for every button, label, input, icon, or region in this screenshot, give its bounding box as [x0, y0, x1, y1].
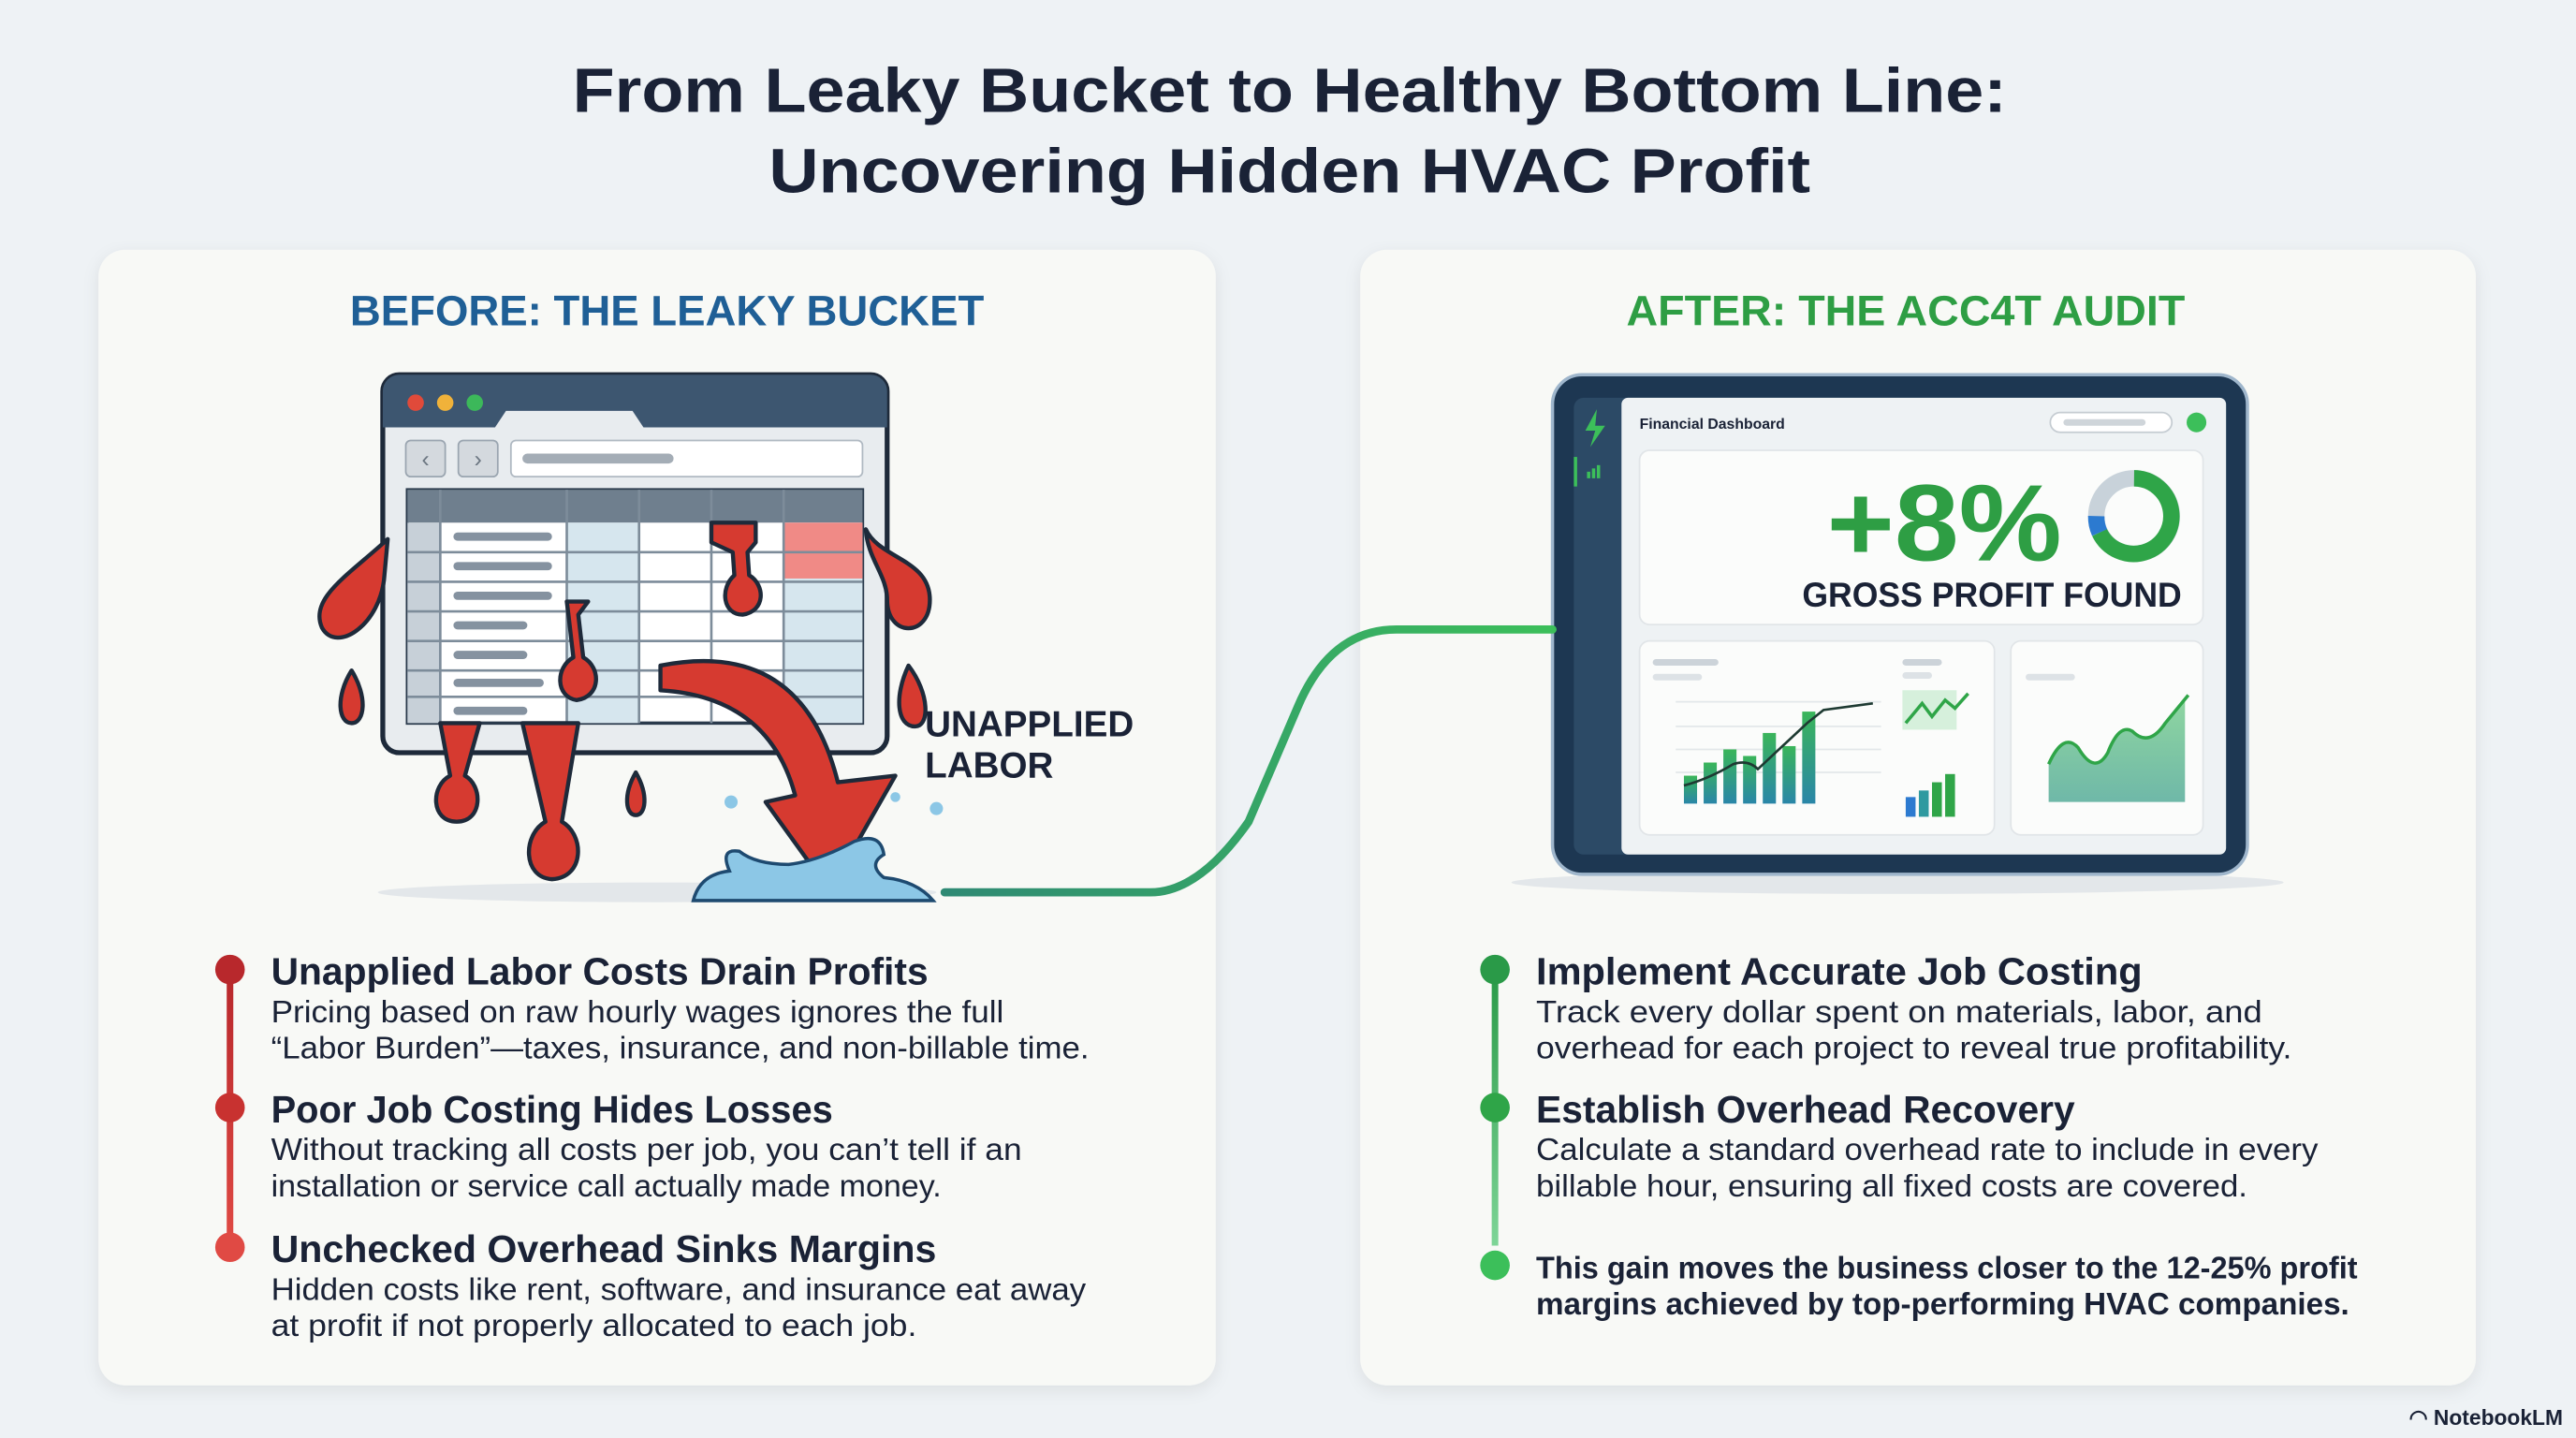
bullet: poor job costing: Without tracking all costs per job, you can’t tell if an [271, 1133, 1022, 1167]
title: From Leaky Bucket to Healthy Bottom Line: [573, 56, 2007, 125]
illustration: leaking spreadsheet [319, 374, 943, 902]
panel: after [1360, 250, 2476, 1386]
heading: before: BEFORE: THE LEAKY BUCKET [350, 287, 984, 335]
timeline: before [215, 955, 245, 1262]
tablet dashboard [1512, 374, 2284, 894]
label: unapplied labor [925, 704, 1134, 785]
bullet: job costing: Implement Accurate Job Costing [1536, 949, 2143, 992]
label: unapplied labor: UNAPPLIED [925, 704, 1134, 744]
tablet dashboard: Financial Dashboard [1640, 417, 1785, 433]
label: unapplied labor: LABOR [925, 745, 1054, 785]
bullet: job costing: overhead for each project to reveal true profitability. [1536, 1031, 2291, 1065]
bullet: unapplied labor costs: Pricing based on raw hourly wages ignores the full [271, 995, 1003, 1030]
bullet: overhead recovery: Calculate a standard overhead rate to include in every [1536, 1133, 2319, 1167]
bullet: conclusion [1536, 1252, 2358, 1322]
card: area chart [2011, 641, 2203, 835]
bullet: unchecked overhead: at profit if not properly allocated to each job. [271, 1309, 916, 1343]
card: +8% gross profit: +8% [1827, 462, 2062, 584]
timeline: after [1480, 955, 1510, 1280]
bullet: unapplied labor costs: “Labor Burden”—taxes, insurance, and non-billable time. [271, 1031, 1090, 1065]
bullet: conclusion: This gain moves the business closer to the 12-25% profit [1536, 1252, 2358, 1286]
bullet: job costing: Track every dollar spent on materials, labor, and [1536, 995, 2262, 1030]
title: Uncovering Hidden HVAC Profit [768, 137, 1810, 206]
bullet: unchecked overhead [271, 1227, 1086, 1343]
title [573, 56, 2007, 206]
card: bar chart [1640, 641, 1995, 835]
bullet: unapplied labor costs [271, 949, 1090, 1065]
bullet: unchecked overhead: Unchecked Overhead Sinks Margins [271, 1227, 936, 1270]
panel: before [98, 250, 1216, 1386]
heading: after: AFTER: THE ACC4T AUDIT [1627, 287, 2185, 335]
bullet: overhead recovery [1536, 1088, 2319, 1204]
bullet: unchecked overhead: Hidden costs like rent, software, and insurance eat away [271, 1272, 1086, 1307]
illustration: leaking spreadsheet: › [475, 448, 482, 473]
bullet: overhead recovery: Establish Overhead Recovery [1536, 1088, 2075, 1131]
illustration: leaking spreadsheet: ‹ [421, 448, 430, 473]
bullet: conclusion: margins achieved by top-performing HVAC companies. [1536, 1287, 2349, 1322]
bullet: poor job costing [271, 1088, 1022, 1204]
arrow: connector from before to after [944, 629, 1553, 892]
bullet: job costing [1536, 949, 2291, 1065]
bullet: unapplied labor costs: Unapplied Labor Costs Drain Profits [271, 949, 929, 992]
bullet: overhead recovery: billable hour, ensuring all fixed costs are covered. [1536, 1169, 2247, 1204]
footer: NotebookLM: ◠ NotebookLM [2409, 1405, 2563, 1430]
card: +8% gross profit: GROSS PROFIT FOUND [1802, 576, 2182, 614]
bullet: poor job costing: installation or service call actually made money. [271, 1169, 942, 1204]
bullet: poor job costing: Poor Job Costing Hides Losses [271, 1088, 833, 1131]
card: +8% gross profit [1640, 450, 2203, 624]
